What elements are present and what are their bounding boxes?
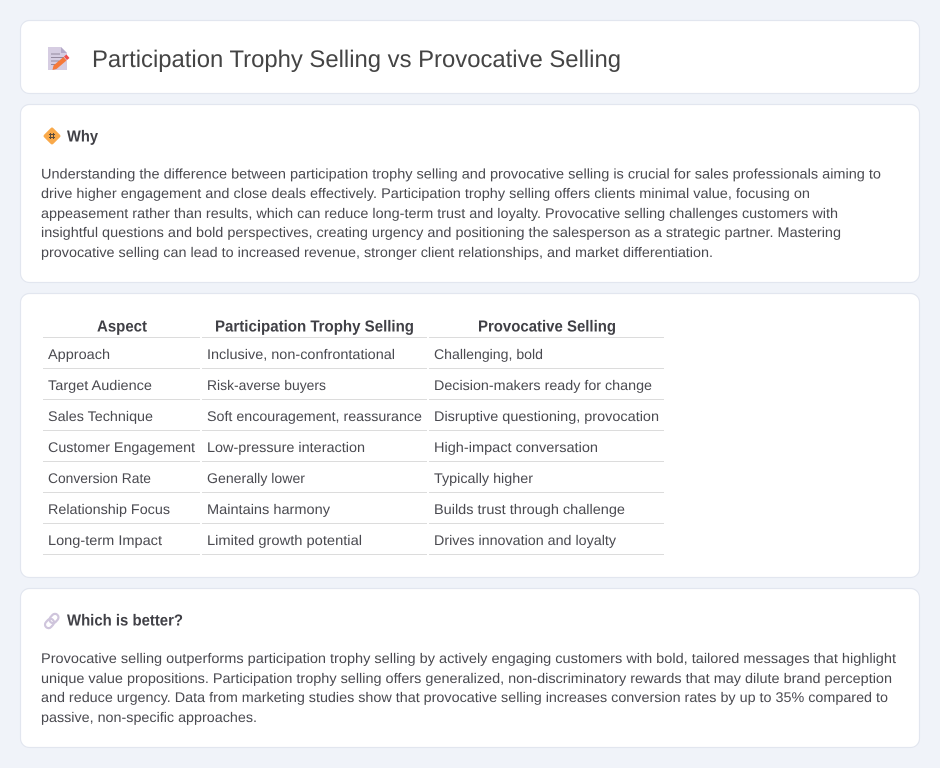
- row: sales technique: [48, 408, 659, 424]
- text block: why: provocative selling can lead to increased revenue, stronger client relationships, and market differentiation.: [41, 244, 713, 260]
- table header: Provocative Selling: [478, 318, 616, 336]
- row: customer engagement: High-impact conversation: [434, 439, 598, 455]
- row: conversion rate: Conversion Rate: [48, 470, 151, 486]
- row: sales technique: Disruptive questioning, provocation: [434, 408, 659, 424]
- text block: which is better: [41, 650, 896, 725]
- row: target audience: [48, 377, 652, 393]
- icon: link: [44, 612, 60, 630]
- row: long-term impact: Long-term Impact: [48, 532, 162, 548]
- row: long-term impact: [48, 532, 616, 548]
- icon: diamond sign: [43, 127, 61, 145]
- row: conversion rate: [48, 470, 533, 486]
- icon: memo with pencil: [48, 47, 70, 70]
- panel: why: [20, 104, 920, 282]
- row: approach: [48, 346, 543, 362]
- table header: [97, 318, 616, 336]
- text block: which is better: passive, non-specific approaches.: [41, 709, 257, 725]
- heading: why: Why: [67, 128, 98, 146]
- panel: which is better: [20, 588, 920, 748]
- panel: comparison table: [20, 294, 920, 578]
- text block: why: appeasement rather than results, which can reduce long-term trust and loyalty. Provocative selling challenges customers with: [41, 205, 838, 221]
- panel: title header: [20, 20, 920, 94]
- text block: why: [41, 166, 881, 260]
- heading: which is better: Which is better?: [67, 612, 183, 630]
- row: relationship focus: Builds trust through challenge: [434, 501, 625, 517]
- text block: why: Understanding the difference between participation trophy selling and provocative selling is crucial for sales professionals aiming to: [41, 166, 881, 182]
- row: approach: Approach: [48, 346, 110, 362]
- row: approach: Inclusive, non-confrontational: [207, 346, 395, 362]
- row: customer engagement: Low-pressure interaction: [207, 439, 365, 455]
- text block: why: drive higher engagement and close deals effectively. Participation trophy selling offers clients minimal value, focusing on: [41, 185, 810, 201]
- row: relationship focus: [48, 501, 625, 517]
- table header: Participation Trophy Selling: [215, 318, 414, 336]
- text block: which is better: and reduce urgency. Data from marketing studies show that provocative selling increases conversion rates by up to 35% compared to: [41, 689, 888, 705]
- title: Participation Trophy Selling vs Provocative Selling: [92, 46, 621, 73]
- row: sales technique: Sales Technique: [48, 408, 153, 424]
- row: relationship focus: Maintains harmony: [207, 501, 330, 517]
- row: conversion rate: Typically higher: [434, 470, 533, 486]
- row: target audience: Decision-makers ready for change: [434, 377, 652, 393]
- row: approach: Challenging, bold: [434, 346, 543, 362]
- row: relationship focus: Relationship Focus: [48, 501, 170, 517]
- row: long-term impact: Drives innovation and loyalty: [434, 532, 616, 548]
- row: target audience: Risk-averse buyers: [207, 377, 326, 393]
- table header: Aspect: [97, 318, 148, 336]
- row: target audience: Target Audience: [48, 377, 152, 393]
- row: customer engagement: [48, 439, 598, 455]
- text block: which is better: Provocative selling outperforms participation trophy selling by actively engaging customers with bold, tailored messages that highlight: [41, 650, 896, 666]
- text block: why: insightful questions and bold perspectives, creating urgency and positioning the salesperson as a strategic partner. Mastering: [41, 224, 841, 240]
- row: sales technique: Soft encouragement, reassurance: [207, 408, 422, 424]
- row: conversion rate: Generally lower: [207, 470, 305, 486]
- row: long-term impact: Limited growth potential: [207, 532, 362, 548]
- text block: which is better: unique value propositions. Participation trophy selling offers generalized, non-discriminatory rewards that may dilute brand perception: [41, 670, 892, 686]
- row: customer engagement: Customer Engagement: [48, 439, 195, 455]
